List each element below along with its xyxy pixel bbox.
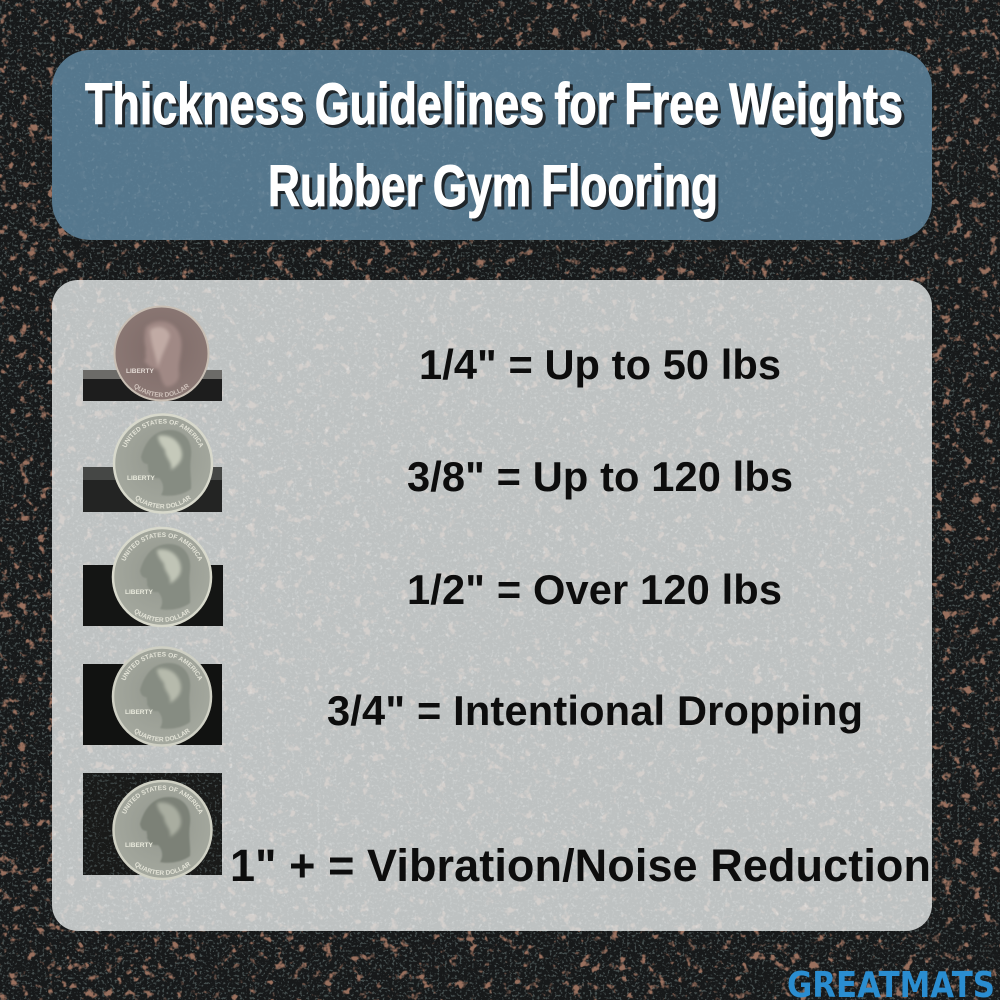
- sample: 1/4 inch mat with coin: [83, 306, 222, 402]
- sample: 1 inch mat with coin: LIBERTY: [125, 842, 153, 849]
- sample: 3/4 inch mat with coin: QUARTER DOLLAR: [134, 728, 190, 742]
- sample: 1/2 inch mat with coin: [83, 526, 223, 628]
- panel: thickness guidelines: [52, 280, 932, 931]
- sample: 3/8 inch mat with coin: [83, 413, 222, 514]
- sample: 1/2 inch mat with coin: QUARTER DOLLAR: [134, 609, 190, 622]
- guideline: 3/8 inch: 3/8" = Up to 120 lbs: [407, 453, 793, 500]
- sample: 1 inch mat with coin: [83, 773, 222, 880]
- sample: 3/8 inch mat with coin: UNITED STATES OF AMERICA: [122, 418, 204, 448]
- sample: 3/8 inch mat with coin: QUARTER DOLLAR: [136, 496, 191, 509]
- guideline: 1 inch plus: 1" + = Vibration/Noise Reduction: [230, 840, 931, 891]
- sample: 1 inch mat with coin: UNITED STATES OF AMERICA: [122, 785, 203, 814]
- guideline: 1/2 inch: 1/2" = Over 120 lbs: [407, 566, 782, 613]
- guideline: 3/4 inch: 3/4" = Intentional Dropping: [327, 687, 863, 734]
- sample: 3/4 inch mat with coin: UNITED STATES OF AMERICA: [121, 652, 202, 681]
- sample: 3/8 inch mat with coin: LIBERTY: [127, 475, 155, 482]
- title line 2: Rubber Gym Flooring: [268, 154, 718, 219]
- sample: 1 inch mat with coin: QUARTER DOLLAR: [135, 862, 190, 876]
- sample: 1/4 inch mat with coin: QUARTER DOLLAR: [134, 384, 190, 398]
- sample: 3/4 inch mat with coin: [83, 646, 222, 746]
- sample: 1/2 inch mat with coin: LIBERTY: [125, 589, 153, 596]
- sample: 3/4 inch mat with coin: LIBERTY: [125, 709, 153, 716]
- panel: title banner: [52, 50, 932, 240]
- title line 2: Rubber Gym Flooring: [271, 157, 721, 222]
- guideline: 1/4 inch: 1/4" = Up to 50 lbs: [419, 341, 781, 388]
- sample: 1/4 inch mat with coin: LIBERTY: [126, 368, 154, 375]
- sample: 1/2 inch mat with coin: UNITED STATES OF AMERICA: [121, 532, 202, 562]
